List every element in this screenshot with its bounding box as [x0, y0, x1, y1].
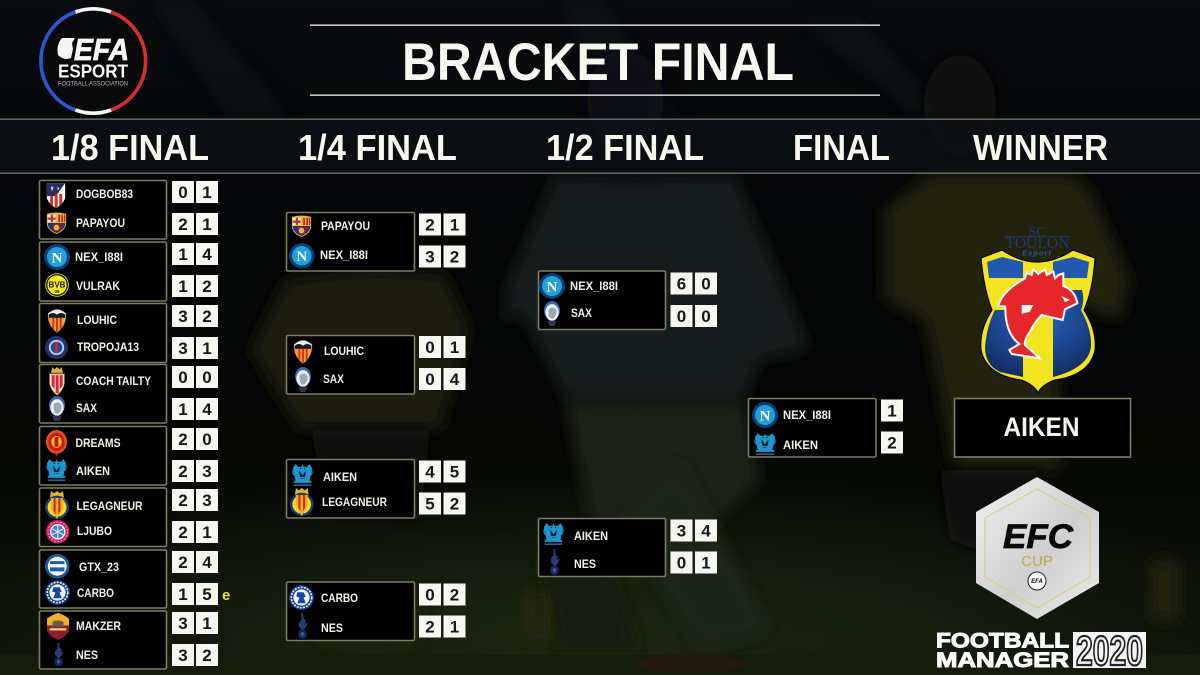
match: Nex_I88I vs Sax: 6	[677, 274, 686, 294]
match: Papayou vs Nex_I88I: NEX_I88I	[320, 250, 368, 262]
match: Nex_I88I vs Sax: NEX_I88I	[570, 281, 618, 293]
match: Carbo vs Nes: 0	[425, 586, 435, 604]
note: yellow e marker: e	[222, 587, 230, 604]
match: Louhic vs Sax	[286, 336, 466, 394]
winner panel: Aiken	[954, 398, 1130, 457]
match: Makzer vs Nes: 2	[202, 646, 212, 665]
logo: EFA Esport: FOOTBALL ASSOCIATION	[58, 80, 128, 88]
match: Nex_I88I vs Vulrak: 1	[178, 245, 188, 264]
match: Louhic vs Sax: LOUHIC	[324, 346, 364, 358]
match: Louhic vs Tropoja13	[40, 304, 218, 362]
match: Aiken vs Nes: 1	[701, 554, 711, 572]
match: Carbo vs Nes: 1	[450, 618, 459, 636]
match: GTX_23 vs Carbo	[40, 550, 218, 608]
match: Legagneur vs Ljubo: 1	[202, 523, 212, 542]
match: Papayou vs Nex_I88I: PAPAYOU	[321, 221, 370, 233]
match: Louhic vs Sax: 0	[425, 370, 435, 389]
icon: SC Toulon Esport crest	[981, 225, 1095, 392]
match: Aiken vs Nes: 3	[677, 522, 686, 540]
match: Dreams vs Aiken: 2	[178, 430, 188, 449]
logo: EFC Cup	[976, 477, 1099, 619]
logo: Football Manager 2020: MANAGER	[936, 649, 1069, 672]
match: Louhic vs Tropoja13: 3	[178, 307, 188, 326]
match: Nex_I88I vs Sax: 0	[701, 307, 711, 326]
logo: Football Manager 2020: 2020	[1076, 627, 1143, 674]
winner panel: Aiken: AIKEN	[1004, 412, 1080, 442]
crest wordmark: Esport	[1022, 248, 1052, 258]
match: Nex_I88I vs Sax: 0	[701, 274, 711, 294]
match: Louhic vs Tropoja13: LOUHIC	[77, 315, 117, 327]
match: GTX_23 vs Carbo: 5	[202, 585, 212, 604]
match: Nex_I88I vs Sax: 0	[677, 307, 686, 326]
panel: round of 16	[40, 180, 230, 669]
heading: final: FINAL	[793, 127, 890, 168]
match: Louhic vs Tropoja13: TROPOJA13	[77, 342, 139, 354]
match: Aiken vs Legagneur: 2	[450, 494, 459, 514]
match: Dogbob83 vs Papayou: DOGBOB83	[76, 189, 133, 201]
heading: winner: WINNER	[973, 127, 1108, 168]
heading: 1/8 final: 1/8 FINAL	[51, 127, 209, 168]
match: Papayou vs Nex_I88I: 1	[450, 216, 459, 234]
match: GTX_23 vs Carbo: GTX_23	[79, 562, 119, 574]
match: Carbo vs Nes: 2	[425, 618, 435, 636]
logo: Football Manager 2020	[936, 627, 1146, 674]
logo: EFC Cup: EFA	[1031, 579, 1043, 585]
match: Carbo vs Nes: NES	[321, 623, 343, 635]
match: Nex_I88I vs Vulrak: 4	[202, 245, 212, 264]
match: Makzer vs Nes: 1	[202, 614, 212, 633]
match: Aiken vs Legagneur: LEGAGNEUR	[322, 497, 388, 509]
match: Nex_I88I vs Vulrak: VULRAK	[76, 281, 121, 293]
match: Coach Tailty vs Sax: 4	[202, 400, 212, 419]
crest wordmark: SC	[1028, 225, 1046, 240]
match: Aiken vs Legagneur: AIKEN	[323, 472, 357, 484]
match: Coach Tailty vs Sax: SAX	[76, 403, 97, 415]
match: Louhic vs Sax: 4	[450, 370, 460, 389]
match: Coach Tailty vs Sax	[40, 364, 218, 423]
match: Dreams vs Aiken: DREAMS	[76, 438, 121, 450]
match: Dogbob83 vs Papayou	[40, 180, 218, 239]
panel: final match: 1	[887, 402, 897, 420]
match: Makzer vs Nes: MAKZER	[76, 621, 122, 633]
match: Aiken vs Nes: NES	[574, 559, 596, 571]
match: Aiken vs Legagneur	[286, 460, 466, 518]
match: Aiken vs Nes	[538, 518, 717, 576]
heading: 1/2 final: 1/2 FINAL	[546, 127, 704, 168]
match: Louhic vs Tropoja13: 2	[202, 307, 212, 326]
logo: EFA Esport	[41, 9, 146, 113]
match: GTX_23 vs Carbo: CARBO	[77, 588, 114, 600]
match: Carbo vs Nes: CARBO	[321, 593, 358, 605]
panel: final match: NEX_I88I	[783, 410, 831, 422]
match: Dogbob83 vs Papayou: 1	[202, 183, 212, 202]
match: Dogbob83 vs Papayou: 2	[178, 215, 188, 234]
logo: Football Manager 2020: FOOTBALL	[936, 630, 1069, 652]
match: Louhic vs Sax: 1	[450, 338, 459, 357]
match: Nex_I88I vs Sax	[538, 271, 717, 330]
match: Makzer vs Nes	[40, 611, 218, 669]
match: Louhic vs Tropoja13: 3	[178, 339, 188, 358]
match: Carbo vs Nes	[286, 582, 466, 640]
panel: final match	[748, 398, 903, 457]
match: Legagneur vs Ljubo: 3	[202, 491, 212, 510]
match: Louhic vs Tropoja13: 1	[202, 339, 212, 358]
match: Dreams vs Aiken: 2	[178, 462, 188, 481]
crest wordmark	[1005, 225, 1070, 258]
panel: quarter finals	[286, 212, 466, 640]
match: Dogbob83 vs Papayou: 0	[178, 183, 188, 202]
panel: final match: AIKEN	[783, 440, 818, 452]
header band	[0, 118, 1200, 174]
match: Aiken vs Legagneur: 4	[425, 462, 435, 482]
match: Dreams vs Aiken: 3	[202, 462, 212, 481]
logo: EFA Esport: EFA	[74, 32, 129, 67]
match: Coach Tailty vs Sax: 1	[178, 400, 188, 419]
match: Nex_I88I vs Vulrak: 2	[202, 277, 212, 296]
match: GTX_23 vs Carbo: 2	[178, 553, 188, 572]
match: Nex_I88I vs Vulrak	[40, 242, 218, 301]
logo: EFC Cup: CUP	[1021, 553, 1053, 570]
crest wordmark: TOULON	[1006, 235, 1070, 252]
match: Aiken vs Legagneur: 5	[425, 494, 435, 514]
match: GTX_23 vs Carbo: 1	[178, 585, 188, 604]
title: Bracket Final: BRACKET FINAL	[402, 33, 794, 92]
heading: 1/4 final: 1/4 FINAL	[298, 127, 457, 168]
match: Aiken vs Nes: AIKEN	[574, 531, 608, 543]
match: Legagneur vs Ljubo: LJUBO	[77, 526, 112, 538]
match: Coach Tailty vs Sax: 0	[202, 368, 212, 387]
match: Legagneur vs Ljubo: LEGAGNEUR	[76, 501, 143, 513]
match: Legagneur vs Ljubo	[40, 488, 218, 546]
match: Papayou vs Nex_I88I: 2	[450, 248, 459, 266]
match: Coach Tailty vs Sax: COACH TAILTY	[76, 376, 151, 388]
match: Papayou vs Nex_I88I: 2	[425, 216, 435, 234]
match: Legagneur vs Ljubo: 2	[178, 491, 188, 510]
match: Makzer vs Nes: 3	[178, 646, 188, 665]
match: Makzer vs Nes: NES	[76, 650, 98, 662]
match: Dogbob83 vs Papayou: PAPAYOU	[76, 218, 125, 230]
match: Aiken vs Legagneur: 5	[450, 462, 459, 482]
match: Dogbob83 vs Papayou: 1	[202, 215, 212, 234]
panel: final match: 2	[887, 434, 897, 452]
match: Louhic vs Sax: 0	[425, 338, 435, 357]
match: Louhic vs Sax: SAX	[323, 374, 344, 386]
match: Aiken vs Nes: 4	[701, 522, 711, 540]
match: Papayou vs Nex_I88I: 3	[425, 248, 435, 266]
match: Makzer vs Nes: 3	[178, 614, 188, 633]
match: Nex_I88I vs Vulrak: NEX_I88I	[75, 252, 123, 264]
match: Dreams vs Aiken: AIKEN	[76, 466, 110, 478]
match: Aiken vs Nes: 0	[677, 554, 686, 572]
match: Dreams vs Aiken: 0	[202, 430, 212, 449]
match: Legagneur vs Ljubo: 2	[178, 523, 188, 542]
panel: semi finals	[538, 271, 717, 576]
match: GTX_23 vs Carbo: 4	[202, 553, 212, 572]
match: Nex_I88I vs Sax: SAX	[571, 308, 592, 320]
match: Carbo vs Nes: 2	[450, 586, 459, 604]
match: Dreams vs Aiken	[40, 426, 218, 485]
match: Nex_I88I vs Vulrak: 1	[178, 277, 188, 296]
logo: EFC Cup: EFC	[1003, 518, 1073, 556]
match: Papayou vs Nex_I88I	[286, 212, 466, 271]
logo: EFA Esport: ESPORT	[58, 60, 129, 82]
match: Coach Tailty vs Sax: 0	[178, 368, 188, 387]
